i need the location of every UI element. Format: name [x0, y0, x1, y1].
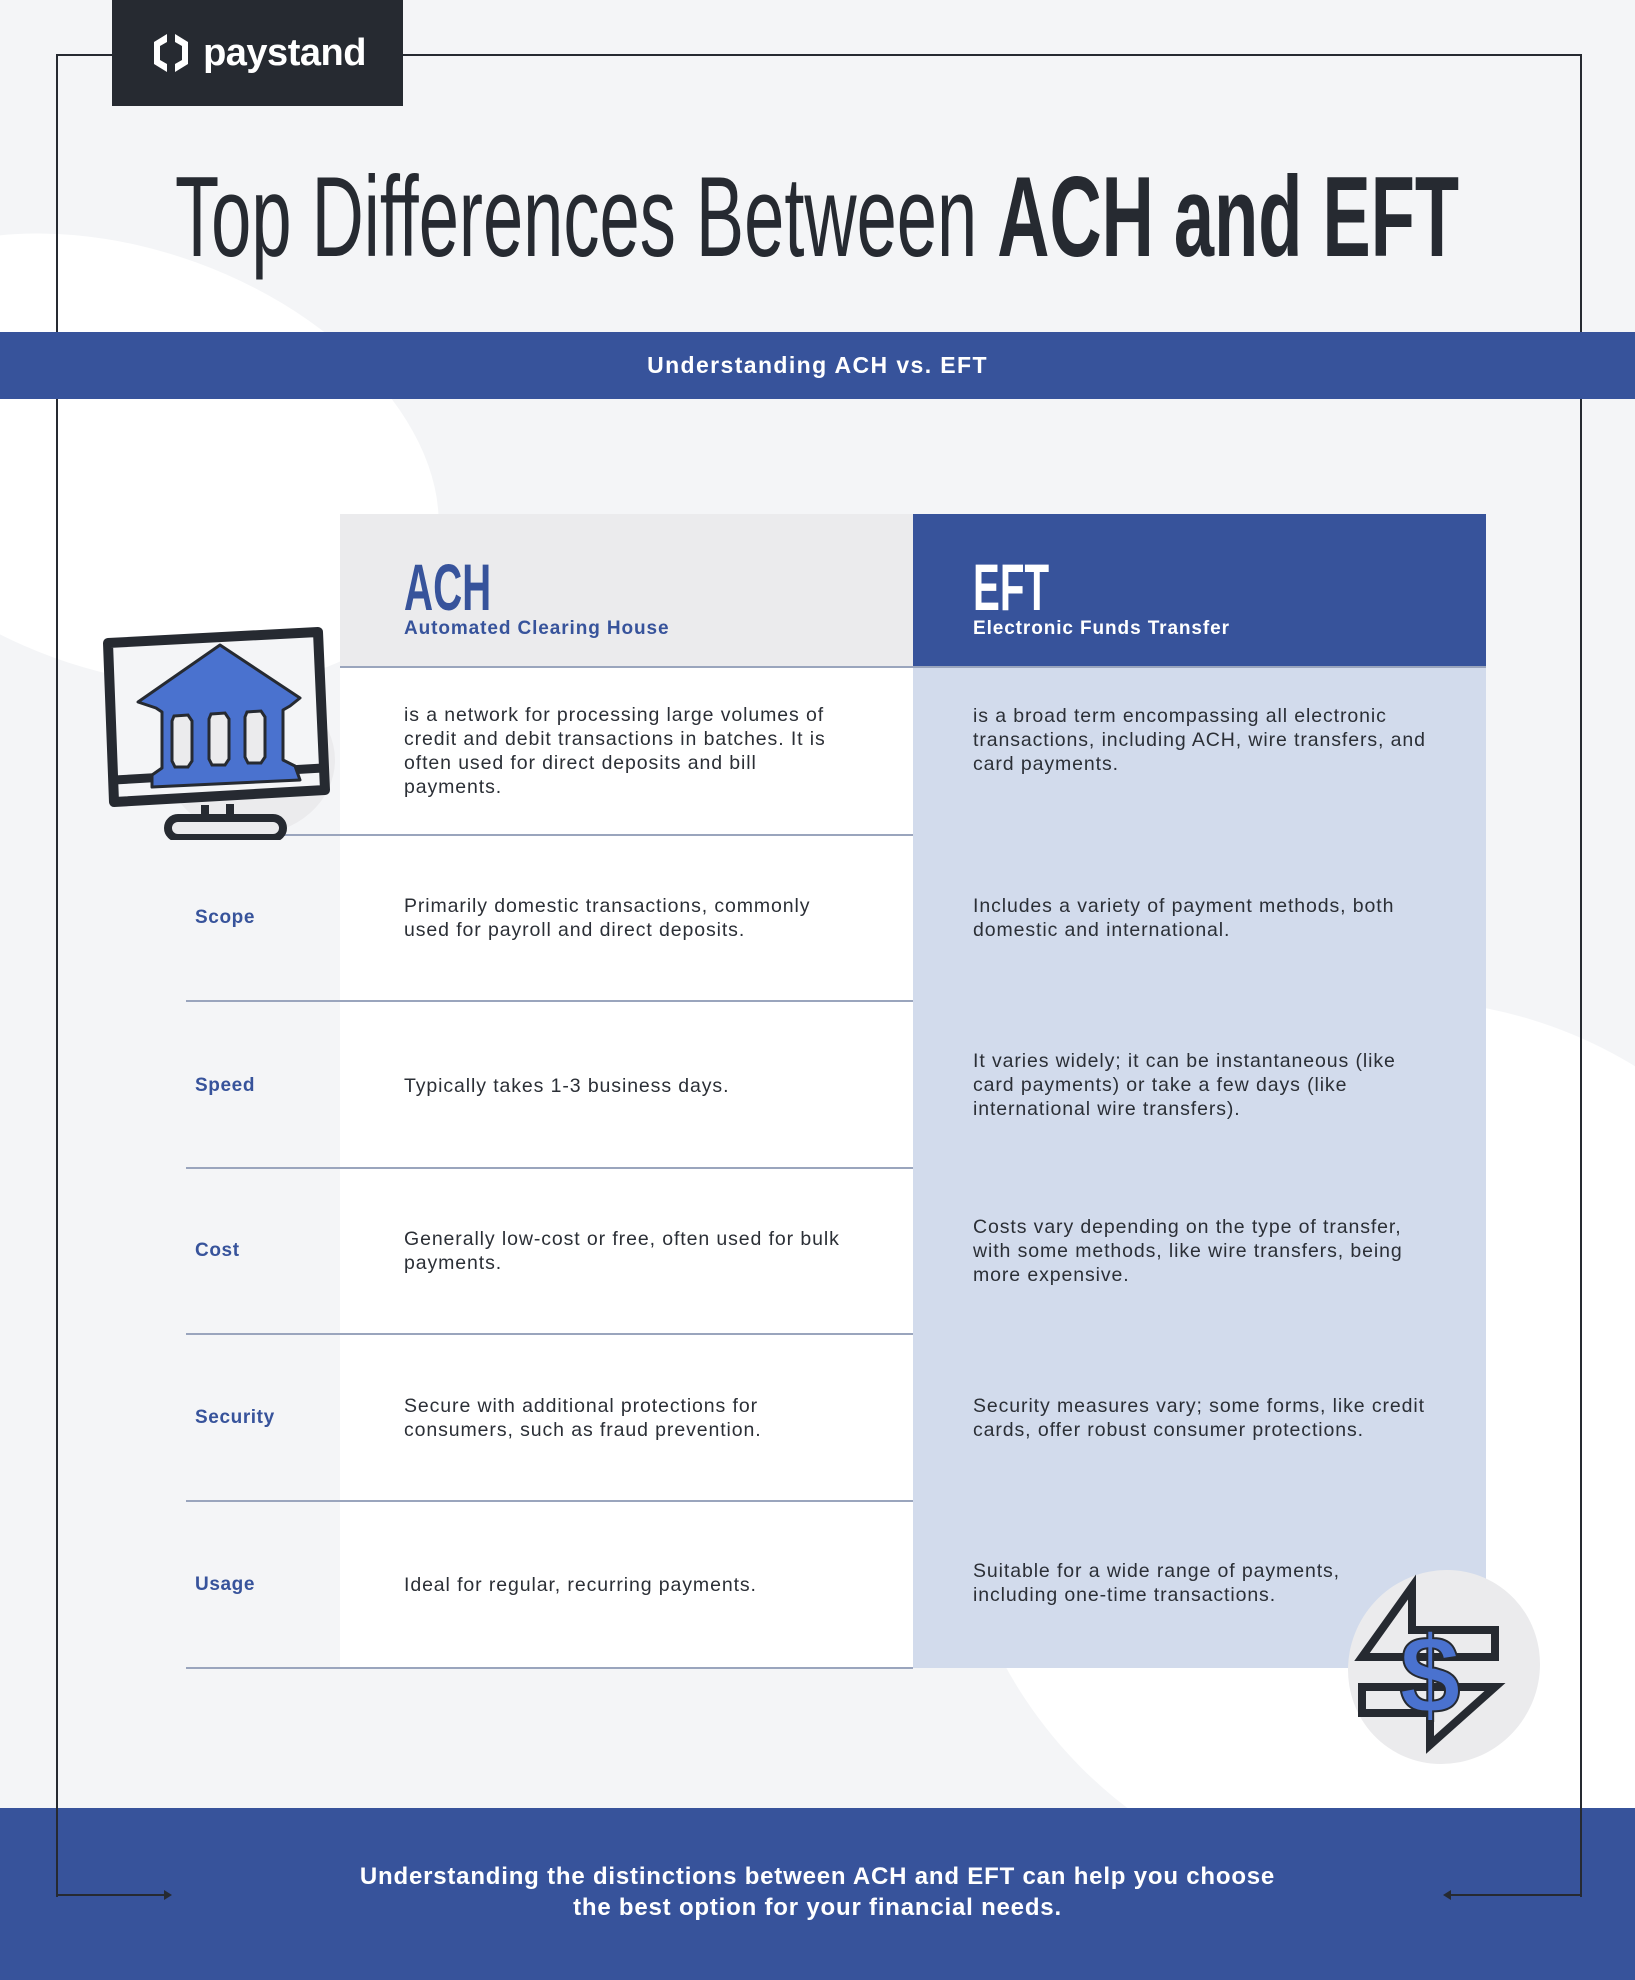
logo: paystand [203, 32, 366, 74]
row: definition: is a network for processing large volumes of [404, 704, 824, 726]
table: cards, offer robust consumer protections. [973, 1418, 1364, 1440]
table: domestic and international. [973, 919, 1230, 941]
table: Primarily domestic transactions, commonly [404, 895, 810, 917]
ACH column [340, 514, 913, 1668]
icon: dollar transfer: $ [1399, 1614, 1461, 1737]
subtitle band [0, 332, 1635, 399]
table: with some methods, like wire transfers, being [973, 1240, 1403, 1262]
title: Top Differences Between ACH and EFT [175, 154, 1459, 281]
row: definition: credit and debit transactions in batches. It is [404, 728, 826, 750]
table: card payments. [973, 753, 1119, 775]
row: security: Security [195, 1406, 275, 1428]
table: Includes a variety of payment methods, both [973, 895, 1394, 917]
table: Costs vary depending on the type of transfer, [973, 1216, 1402, 1238]
table: Typically takes 1-3 business days. [404, 1075, 729, 1097]
icon: bank monitor [103, 627, 335, 840]
table: Security measures vary; some forms, like credit [973, 1394, 1425, 1416]
header: ACH: ACH [404, 550, 491, 624]
table: used for payroll and direct deposits. [404, 919, 745, 941]
table: Generally low-cost or free, often used for bulk [404, 1228, 840, 1250]
row: speed: Speed [195, 1075, 255, 1096]
subtitle band: Understanding ACH vs. EFT [647, 352, 988, 378]
table: is a broad term encompassing all electronic [973, 705, 1387, 727]
header: EFT [973, 550, 1230, 639]
EFT column [913, 514, 1486, 1668]
table: It varies widely; it can be instantaneous (like [973, 1050, 1396, 1072]
table: transactions, including ACH, wire transfers, and [973, 729, 1426, 751]
icon: dollar transfer [1348, 1570, 1540, 1764]
row: definition: payments. [404, 776, 502, 798]
header: EFT: EFT [973, 550, 1049, 624]
header: EFT: Electronic Funds Transfer [973, 618, 1230, 639]
footer band: the best option for your financial needs. [573, 1894, 1062, 1921]
row: usage: Usage [195, 1574, 255, 1594]
logo [112, 0, 403, 106]
table: more expensive. [973, 1264, 1130, 1286]
table: card payments) or take a few days (like [973, 1074, 1347, 1096]
arrow: bottom right [1445, 1894, 1582, 1896]
arrow: bottom left [56, 1894, 170, 1896]
footer band: Understanding the distinctions between ACH and EFT can help you choose [360, 1863, 1275, 1890]
table: consumers, such as fraud prevention. [404, 1418, 762, 1440]
row: definition: often used for direct deposits and bill [404, 752, 757, 774]
footer band [0, 1808, 1635, 1980]
header: ACH: Automated Clearing House [404, 618, 669, 639]
row: scope: Scope [195, 907, 255, 928]
table: international wire transfers). [973, 1098, 1241, 1120]
row: cost: Cost [195, 1240, 240, 1261]
table: Ideal for regular, recurring payments. [404, 1574, 757, 1596]
table: payments. [404, 1252, 502, 1274]
header: ACH [404, 550, 669, 639]
table: including one-time transactions. [973, 1584, 1276, 1606]
table: Suitable for a wide range of payments, [973, 1560, 1340, 1582]
row: definition [404, 704, 826, 798]
table: Secure with additional protections for [404, 1394, 758, 1416]
